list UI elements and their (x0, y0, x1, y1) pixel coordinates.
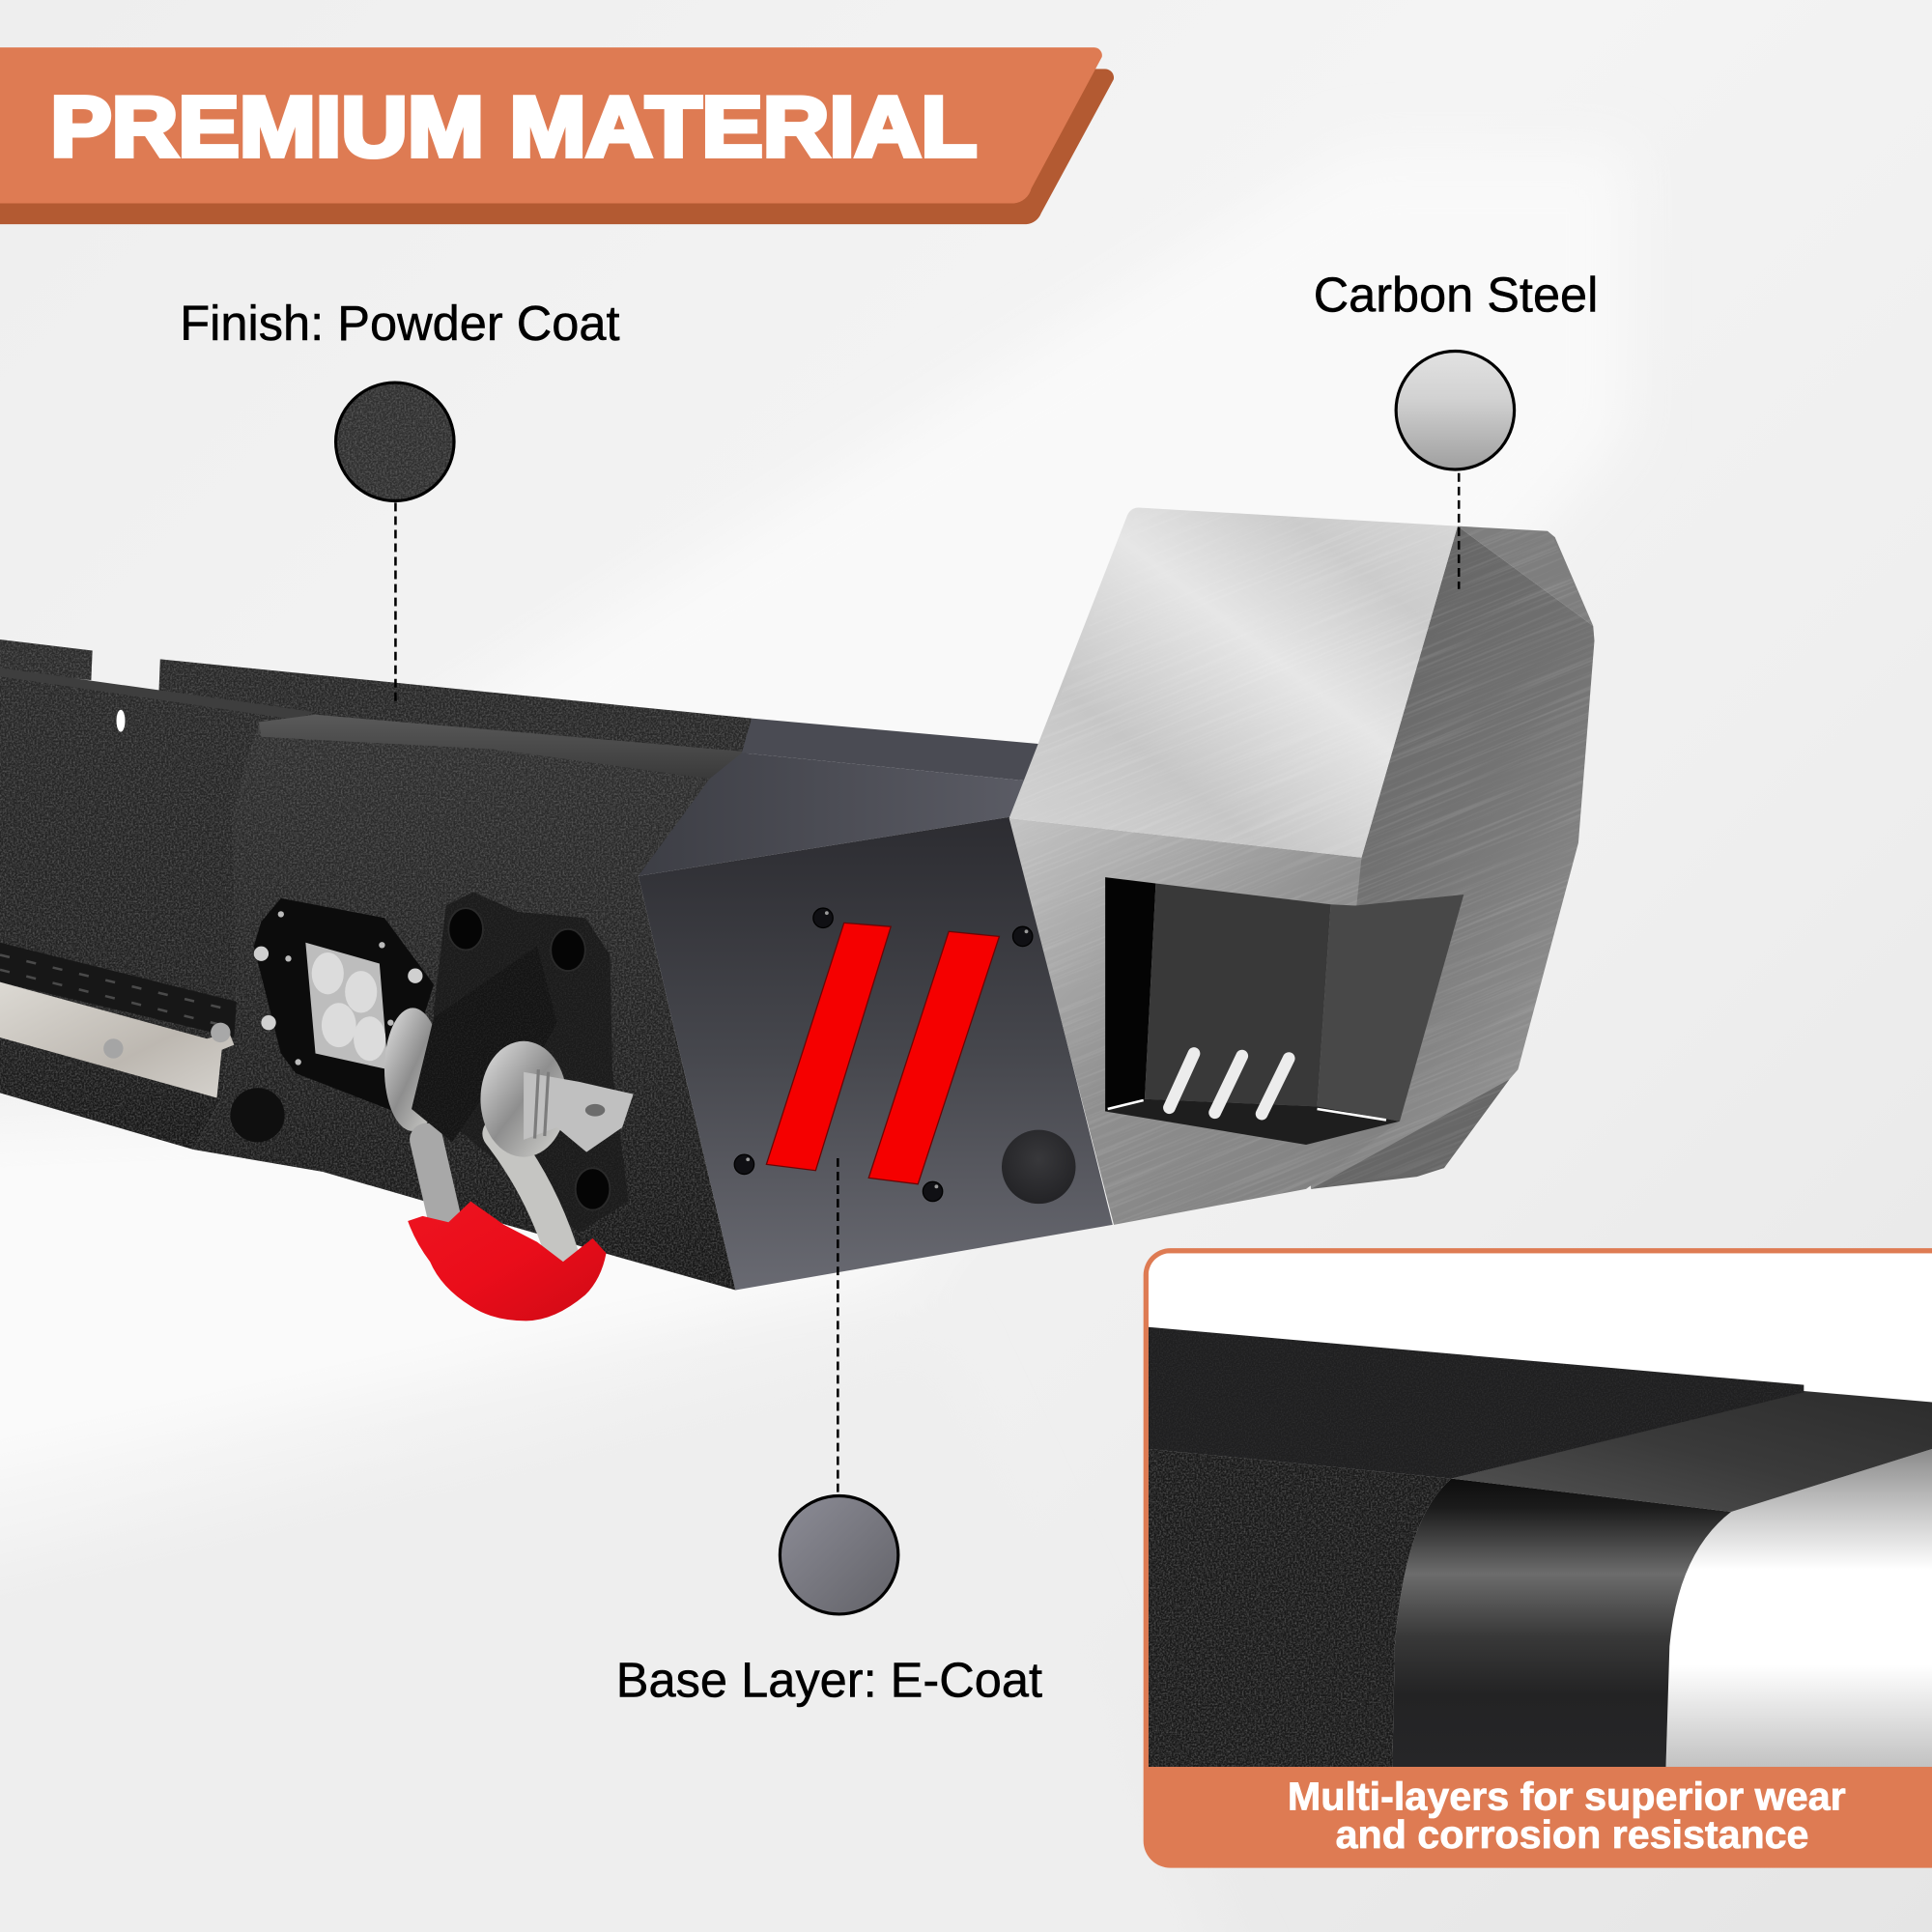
steel top face (1009, 508, 1458, 858)
swatch: e-coat (780, 1495, 898, 1614)
shackle right eye (480, 1041, 567, 1157)
LED lens (305, 943, 388, 1069)
swatch: powder coat (336, 383, 454, 500)
black bolts (734, 908, 1033, 1202)
vent slots (1169, 1054, 1289, 1114)
bracket arm (412, 947, 557, 1142)
powder top (1149, 1327, 1804, 1479)
e-coat top band (742, 719, 1042, 781)
e-coat front (1392, 1479, 1731, 1767)
red shackle cover (408, 1202, 607, 1321)
plug: left (231, 1088, 285, 1142)
rear black tabs (0, 639, 752, 777)
steel end cap (1009, 508, 1594, 1225)
bumper product illustration (0, 164, 1932, 1561)
e-coat face (639, 817, 1113, 1290)
steel layer (1665, 1449, 1932, 1767)
light housing (254, 898, 434, 1112)
shackle bracket plate (434, 892, 629, 1233)
side panel bevel (259, 715, 744, 779)
label: carbon steel: Carbon Steel (1314, 268, 1598, 323)
wall top edge (0, 668, 316, 720)
label: finish: Finish: Powder Coat (180, 296, 620, 351)
leader line (394, 502, 396, 705)
inset image (1149, 1253, 1932, 1767)
powder front (1149, 1449, 1452, 1767)
callout: carbon steel (1314, 268, 1598, 589)
leader line (1458, 473, 1460, 589)
round plug (1002, 1130, 1076, 1204)
brushed steel streaks (1043, 535, 1593, 1209)
shackle left lobe (384, 1008, 441, 1131)
title banner (0, 47, 1114, 224)
inset caption (1288, 1775, 1846, 1857)
stainless step strip (0, 982, 234, 1097)
leader line (837, 1158, 838, 1494)
swatch: steel (1396, 352, 1515, 469)
steel upper corner facet (1458, 526, 1593, 626)
steel front face (1009, 818, 1463, 1225)
steel side facet (1306, 526, 1595, 1189)
rear wall (0, 668, 316, 1150)
steel lower facet (1311, 1079, 1509, 1189)
shackle right leg (499, 1133, 563, 1258)
callout: powder coat (180, 296, 620, 705)
textured side panel (193, 715, 744, 1290)
mounting slot (117, 710, 125, 732)
shackle left leg (426, 1140, 444, 1220)
e-coat bevel (639, 753, 1030, 876)
inset caption: and corrosion resistance (1336, 1812, 1808, 1857)
pin thread (535, 1069, 549, 1139)
callout: e-coat (616, 1158, 1042, 1707)
title text: PREMIUM MATERIAL (50, 78, 977, 174)
inset frame (1144, 1248, 1932, 1868)
shackle pin (524, 1072, 634, 1152)
inset panel: layer cross-section (1144, 1248, 1932, 1868)
vent opening (1105, 877, 1463, 1145)
inset caption: Multi-layers for superior wear (1288, 1775, 1846, 1819)
e-coat top (1452, 1391, 1932, 1512)
red reflector bars (766, 923, 999, 1184)
step tread (0, 943, 237, 1037)
bracket bolts (448, 908, 610, 1210)
label: base layer: Base Layer: E-Coat (616, 1652, 1042, 1707)
pin hole (585, 1104, 605, 1117)
